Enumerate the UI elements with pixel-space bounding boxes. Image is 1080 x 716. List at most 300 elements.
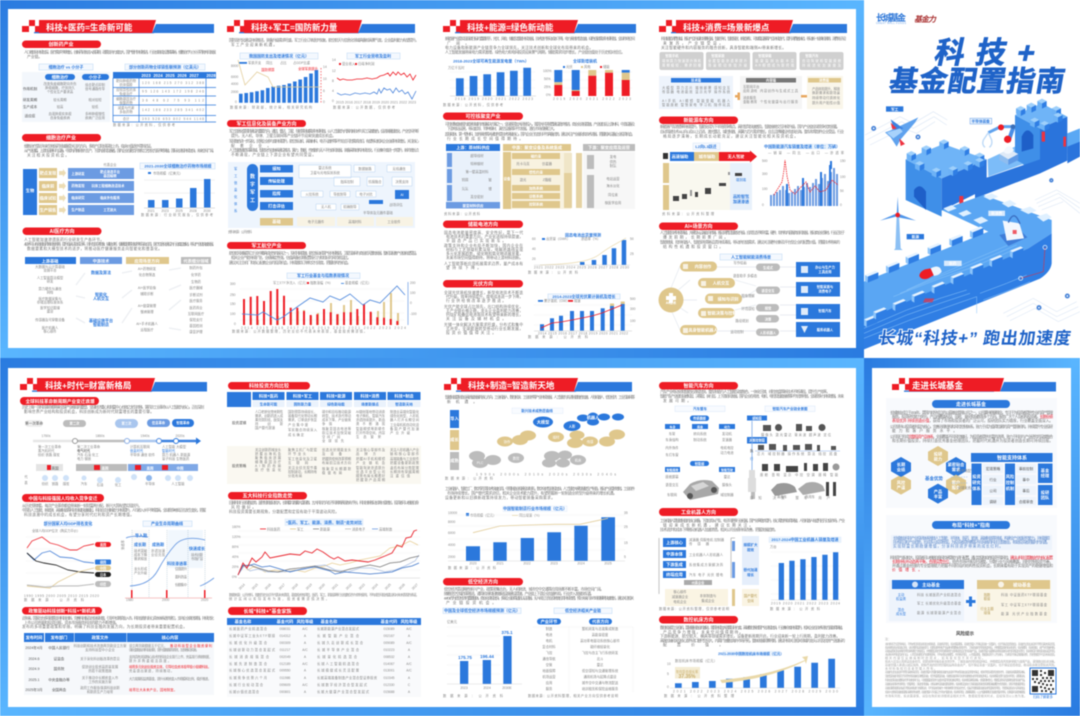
diagram: AI应用图谱: 办公与生产力 bbox=[815, 264, 836, 270]
chart: 行业表现: 0 bbox=[234, 322, 236, 326]
bubble chart: 技术成熟度: 数据来源：公开资料 bbox=[445, 476, 494, 480]
table: 全球药物销售: 双特异性抗体 bbox=[116, 87, 137, 92]
diagram: 产业链结构: 铍 bbox=[488, 177, 492, 182]
chart: 行业表现: 基金规模（亿元） bbox=[345, 280, 371, 285]
table: 基金清单: A/C bbox=[302, 662, 308, 666]
table: 基金清单: 长城创新动力混合发起式 bbox=[229, 647, 276, 652]
text: 储能方向: 半固态产品已实现装车。 bbox=[446, 238, 506, 243]
diagram: 产业链: 代表企业 bbox=[103, 162, 117, 167]
table: 全球药物销售: 核酸药物 bbox=[119, 100, 133, 105]
table: 方向比较: 需求，订单逐步恢复 bbox=[288, 417, 318, 422]
diagram: 产业链结构: 核医学应用 bbox=[605, 200, 621, 205]
stacked chart: 能源结构: 光伏 bbox=[566, 64, 573, 69]
cards: 四类消费: 智能汽车 bbox=[805, 53, 819, 58]
text: section body: 细胞治疗是近年来生物医药领域备受关注的方向，多款产品陆续获批上市，临床价值逐步得到验证。 bbox=[24, 144, 154, 148]
diagram: 智能驾驶技术架构: 乘用车 bbox=[777, 494, 788, 499]
chart: 军费与营收: 占GDP比重 bbox=[293, 60, 311, 65]
table: 方向比较: 逢低布局分散配置 bbox=[390, 465, 420, 470]
diagram: 消费三要素: 持续带动付费转化 bbox=[812, 95, 841, 100]
table: 方向比较: 注重估值 bbox=[390, 473, 411, 478]
chart: 光伏装机: 300 bbox=[630, 307, 636, 311]
chart: 军费与营收: 14 bbox=[323, 65, 327, 69]
icon: jet bbox=[885, 117, 918, 147]
line chart: 五大行业走势: 2021 bbox=[331, 583, 339, 591]
diagram: 产业图谱: 中游技术 bbox=[93, 258, 110, 264]
diagram: 六边形: 长期 bbox=[897, 461, 905, 468]
diagram: 消费三要素: 应用 游戏 bbox=[743, 88, 758, 93]
icon: bag bbox=[999, 216, 1027, 246]
cards: 四类消费 bbox=[660, 52, 844, 70]
bubble chart: 技术成熟度: 传感 bbox=[587, 439, 594, 444]
table: 方向比较: 需求，创新药进入成 bbox=[255, 413, 284, 418]
text: intro: 人工智能发展带来电力需求激增，绿色电力和电网投资迎来景气周期，储能需求同步增长，产业链估值处于历史相对低位。 bbox=[445, 50, 625, 54]
chart: 生命周期: 龙头形成 bbox=[134, 566, 148, 571]
table: 细胞治疗与小分子: 疾病广泛应用 bbox=[85, 115, 105, 120]
diagram: 数字军工: 半导体及元器件基础 bbox=[363, 210, 394, 215]
line chart: 五大行业走势: 20% bbox=[232, 565, 239, 569]
chart: 生命周期: 技术突破 bbox=[134, 548, 148, 553]
diagram: 产业链结构: 下游集成 bbox=[666, 561, 684, 568]
diagram: 产业图谱: 存储治理标准体系 bbox=[37, 300, 64, 304]
text: AI+场景 bbox=[660, 230, 845, 249]
pill: 数控机床 bbox=[659, 616, 738, 624]
diagram: 数字军工: 指挥 bbox=[272, 190, 281, 197]
line chart: 五大行业走势: 2027 bbox=[411, 583, 419, 591]
diagram: 数字军工: 工 bbox=[234, 174, 238, 178]
line chart: 五大行业走势: 军工 bbox=[297, 528, 304, 532]
box: 主动权益 bbox=[889, 580, 964, 621]
table: 政策: 推动科技型企业融资便利 bbox=[170, 643, 212, 648]
bubble chart: 技术成熟度: 大模型 bbox=[537, 418, 549, 426]
table: 方向比较: 顺势布局长期看好 bbox=[356, 473, 386, 478]
diagram: 智能驾驶: 高速辅助 bbox=[672, 153, 688, 160]
text: 光伏方向: 投资价值值得关注。 bbox=[446, 330, 496, 335]
icon: car bbox=[683, 480, 719, 500]
diagram: 六边形: 服务 bbox=[952, 484, 961, 491]
box: 引言 bbox=[891, 535, 1052, 550]
text: 免责声明: 本材料仅为宣传用途，不构成任何投资建议或承诺，基金有风险，投资需谨慎。基金管理人不保证基金一定盈利，也不保证最低收益，基金的过往业绩并不预示其未来表现。 bbox=[885, 641, 1057, 646]
table: 方向比较: 生态繁荣 bbox=[356, 434, 382, 439]
table: 方向比较: 绿色新动能 bbox=[327, 402, 345, 406]
diagram: 数字军工: 数据链路 bbox=[358, 166, 372, 171]
diagram: 汽车零部件: 座舱屏幕 bbox=[665, 474, 679, 479]
table: 政策: 培育多元化创业投资主体，引导社会资本投早投小投硬科技。 bbox=[129, 664, 211, 669]
bubble chart: 技术成熟度: 1990s 2000s 2010s 2020s 2030s 2040s bbox=[476, 472, 616, 476]
diagram: 产业图谱: 应用场景方向 bbox=[134, 258, 160, 264]
tagline: 长城“科技+” 跑出加速度 bbox=[877, 328, 1072, 348]
table: 基金清单: A/C bbox=[302, 683, 308, 687]
bar chart: 工业机器人市场: 25 bbox=[624, 525, 628, 529]
diagram: 产业图谱: 核心部件 bbox=[43, 328, 57, 334]
diagram: 产业链结构: 传感器 bbox=[689, 541, 710, 546]
table: 投研支持体系: 体系 bbox=[972, 485, 981, 492]
diagram: 汽车零部件: 内外饰件 bbox=[665, 445, 679, 450]
table: 方向比较: 科技+制造 bbox=[394, 392, 414, 400]
box: 主动权益: 权益类 bbox=[896, 596, 907, 601]
bar chart: 低空规模 bbox=[443, 607, 522, 698]
line chart: 五大行业走势: 新能源 bbox=[320, 526, 331, 532]
diagram: 连接 bbox=[951, 468, 975, 490]
table: 基金清单: 014067 bbox=[383, 662, 395, 666]
chart: 军费与营收: 数据来源：财政部，统计局，相关研究机构 bbox=[230, 104, 313, 110]
diagram: 产业图谱: 辅助诊断 bbox=[140, 291, 154, 296]
diagram: 产业图谱: 医疗数据采集与 bbox=[38, 296, 62, 301]
bar chart: 数控机床规模: 数据来源：公开资料整理 bbox=[664, 693, 735, 698]
timeline: 工业革命: 人工智能 大模型 bbox=[162, 444, 187, 449]
table: 基金清单: 长城稳健成长灵活配置 bbox=[317, 668, 360, 672]
cards: 四类消费: 自动驾驶和智能座舱 bbox=[802, 58, 842, 63]
table: 方向比较: 聚焦临床进展 bbox=[255, 455, 282, 460]
pill: AI医疗: AI医疗方向 bbox=[49, 228, 75, 235]
text: 光伏方向: 关注设备及辅材机会。 bbox=[446, 316, 506, 321]
chart: 行业景气: 0 bbox=[332, 99, 334, 103]
table: 全球药物销售: 免疫治疗 bbox=[119, 91, 133, 96]
table: 基金清单: 015089 bbox=[383, 627, 395, 631]
line chart: 五大行业走势: 2019 bbox=[305, 583, 313, 591]
timeline: 工业革命: 智能革命 bbox=[176, 420, 190, 425]
bubble chart: 技术成熟度: 机床 bbox=[575, 458, 582, 462]
pill: 基金推荐: 长城“科技+”基金家族 bbox=[244, 608, 291, 615]
chart: 生命周期: 成本下降 bbox=[134, 552, 148, 557]
diagram: 产业链结构: 本体制造与 bbox=[700, 593, 716, 598]
text: 免责声明: 基金是否和投资者的风险承受能力相适应，并根据自身的风险承受能力选择适合自己的基金产品，基金管理人提醒投资者基金投资的买者自负原则，投资者自行承担基金运营风险。 bbox=[885, 648, 1057, 653]
pill: 航空航天 bbox=[227, 242, 306, 250]
table: 基金清单: 014312 bbox=[279, 634, 291, 638]
header: 科技+制造: 科技+制造=智造新天地 bbox=[468, 380, 555, 390]
timeline: 工业革命: 铁路 bbox=[52, 481, 59, 486]
pill: 工业机器人: 工业机器人方向 bbox=[681, 509, 716, 516]
table: 方向比较: 军工信息化及卫星 bbox=[288, 456, 318, 461]
diagram: 产业链 bbox=[23, 162, 134, 215]
pill: 科技投资方法 bbox=[228, 382, 310, 390]
timeline: 工业革命: 第二次工业革命 bbox=[77, 444, 101, 449]
diagram: 汽车零部件: 动力电池 bbox=[720, 450, 734, 455]
panel: 科技+时代 bbox=[20, 378, 421, 697]
table: 全球药物销售 bbox=[113, 64, 216, 127]
timeline: 工业革命: 纺织 bbox=[42, 481, 49, 486]
text: AI医疗: 数据要素和大模型技术的进步，将推动医疗健康服务走向智能化和普惠化。 bbox=[27, 246, 162, 251]
text: eVTOL作为低空经济的重要载体，商业化进程加快，多家企业取得适航认证进展，无人机在工农业及物流应用持续渗透，预计未来几年市场规模将快速增长，建议关注相关 bbox=[444, 596, 634, 600]
chart: 行业景气: 军工行业营收及盈利 bbox=[355, 52, 391, 58]
table: 投研支持体系: 控制 bbox=[1006, 479, 1014, 486]
chart: 新能源车销量: 500 bbox=[762, 159, 768, 163]
text: 智能制造是制造业高质量发展的核心方向，工业机器人、数控机床、工业软件等产业持续发展，人工智能与先进制造融合加速，人形机器人、低空经济、工业互联网等 bbox=[445, 394, 635, 400]
diagram: 六边形: 客户 bbox=[952, 479, 960, 486]
table: 方向比较: 争强 bbox=[322, 421, 333, 426]
text: 免责声明: 市场有风险，投资需谨慎，请您在购买前详细阅读相关文件，数据截至相关时点，后续情况以公告为准。 bbox=[885, 693, 1027, 698]
table: 方向比较: 装备现代化带动长期 bbox=[288, 413, 318, 418]
title: 科技+: 科技+ bbox=[932, 36, 1039, 70]
text: 免责声明: 科技主题基金主要投资于科技相关行业，可能面临较高的行业集中度风险和波动风险，投资者应审慎决策，合理控制仓位，根据自身情况选择合适的基金产品。 bbox=[885, 677, 1027, 682]
timeline: 工业革命: 美国 bbox=[102, 466, 109, 470]
title: 基金配置指南: 基金配置指南 bbox=[887, 66, 1067, 98]
table: 低空产业链: 数据来源：公开资料整理，相关产业方向仅供参考说明 bbox=[528, 693, 619, 698]
timeline: 工业革命: 电气时代 bbox=[77, 448, 91, 453]
table: 方向比较: 控制波动，长期持有 bbox=[288, 469, 318, 474]
table: 方向比较: 互联网 bbox=[288, 460, 309, 465]
logo: 基金配置: 基金力 bbox=[914, 15, 937, 24]
table: 低空产业链: 服务 bbox=[546, 686, 553, 691]
chart: 生命周期: 技术创新 bbox=[191, 552, 204, 557]
table: 基金清单: 011986 bbox=[280, 676, 291, 680]
diagram: AI应用图谱: 语音交互 bbox=[761, 288, 775, 293]
timeline: 工业革命: 表 bbox=[24, 480, 28, 485]
table: 基金清单: 长城高端装备制造产业混合型证券投资 bbox=[317, 675, 378, 680]
text: intro bbox=[24, 50, 216, 59]
bar chart: 低空规模: 2023 bbox=[460, 686, 468, 690]
text: 和长期价值投资，持续打造优秀基金经理团队，把握时代机遇并为投资者创造长期可持续回报。 bbox=[892, 438, 1053, 443]
table: 基金清单: 长城智能产业混合 bbox=[317, 633, 360, 638]
diagram: 产业链: 生物 bbox=[26, 187, 35, 194]
diagram: 汽车零部件: 智能部 bbox=[695, 461, 705, 466]
table: 方向比较: 成本下降，产业链竞 bbox=[322, 417, 352, 422]
table: 方向比较: 电子换机，智能汽车 bbox=[356, 413, 386, 418]
diagram: 产业链结构: 磁约束 bbox=[531, 154, 542, 158]
diagram: AI应用图谱: 人机交互 bbox=[713, 280, 730, 286]
chart: 军费与营收: 占比 bbox=[280, 60, 287, 65]
timeline: 工业革命 bbox=[24, 419, 201, 487]
labels bbox=[886, 106, 1005, 266]
table: 方向比较: 品牌方 bbox=[356, 451, 377, 456]
table: 方向比较: 把握出海机会 bbox=[255, 451, 282, 456]
table: 政策: 科技创新和技术改造再贷款设立方案 bbox=[74, 643, 127, 648]
near tower bbox=[906, 139, 987, 217]
table: 全球药物销售: 2027 bbox=[189, 73, 199, 78]
table: 低空产业链: 电池 bbox=[546, 632, 553, 637]
text: 下游新能源、航空航天、模具等领域需求增长，设备更新周期开启，行业迎来新一轮上行周期，盈利能力改善。 bbox=[660, 634, 840, 638]
table: 政策: 政策文件 bbox=[92, 634, 109, 641]
diagram: AI应用图谱: 具身智能机器人 bbox=[688, 326, 718, 334]
table: 全球药物销售: 2025 bbox=[165, 73, 175, 78]
table: 全球药物销售: 减重与代谢 bbox=[118, 105, 135, 110]
text: intro: 军工产业迎来新机遇。 bbox=[231, 42, 277, 47]
table: 政策: 发布时间 bbox=[26, 634, 42, 641]
text: 长城基金成立于2001年，是国内较早成立的公募基金管理公司之一，公司秉持稳健理念，专注于为投资者提供专业的资产管理 bbox=[890, 410, 1053, 415]
pill: 走进长城基金 bbox=[932, 400, 1010, 408]
text: 免责声明: 本材料版权归基金管理人所有。 bbox=[885, 666, 937, 670]
bar chart: 工业机器人市场: 4000 bbox=[448, 543, 456, 547]
table: 细胞治疗与小分子: 改造免疫细胞靶向杀伤 bbox=[44, 81, 77, 86]
table: 基金清单: 长城大健康产业混合型发起式 bbox=[317, 689, 370, 694]
panel: 科技+制造 bbox=[443, 378, 845, 698]
chart: 军费与营收: 2000 bbox=[231, 90, 239, 94]
table: 细胞治疗与小分子 bbox=[22, 64, 110, 122]
chart: 行业景气: 归母净利润 bbox=[358, 61, 375, 66]
text: intro bbox=[661, 36, 846, 50]
chart: 固态电池: 2021 2022 2023 2024 2025 2026 2027 2028 2030 bbox=[534, 266, 629, 270]
diagram: 六边形: 投研 bbox=[934, 450, 943, 458]
table: 方向比较: AI制药布局 bbox=[255, 463, 281, 468]
chart: 新能源车销量 bbox=[762, 143, 846, 207]
stacked chart: 能源结构: 全球新增装机 bbox=[573, 58, 597, 64]
chart: 光伏装机 bbox=[528, 293, 636, 339]
chart: 行业景气: 14 bbox=[332, 58, 336, 62]
bar chart: 数控机床规模: 10 bbox=[667, 662, 671, 666]
table: 投研支持体系: 事中 bbox=[1022, 477, 1030, 482]
diagram: AI应用图谱: 人形机器人 bbox=[760, 330, 777, 335]
chart: 新能源车销量: 中国新能源汽车销量及增速（单位：万辆） bbox=[764, 143, 840, 149]
table: 方向比较: 布局前沿技术方向 bbox=[322, 460, 351, 465]
table: 政策: 中国人民银行 bbox=[48, 645, 70, 650]
diagram: 数字军工: 电子对抗 bbox=[359, 192, 373, 196]
diagram: 数字军工: 字 bbox=[250, 181, 255, 188]
pill: 储能产业 bbox=[443, 112, 523, 120]
table: 基金清单: C bbox=[408, 683, 411, 687]
chart: 生命周期: 2020 bbox=[201, 598, 209, 602]
table: 投研支持体系: 宏观策略 bbox=[986, 466, 1001, 471]
table: 方向比较: 智造新天地 bbox=[395, 402, 413, 406]
diagram: 数字军工: 感知 bbox=[272, 165, 281, 172]
diagram: 消费三要素: 技术端 bbox=[691, 78, 702, 82]
diagram: 消费三要素: 消费端 bbox=[819, 78, 830, 82]
chart: 生命周期: 产业生命周期曲线 bbox=[151, 520, 183, 526]
table: 全球药物销售: 2028 bbox=[206, 73, 216, 78]
chart: 生命周期: 2000 bbox=[162, 598, 170, 602]
table: 方向比较: 果兑现阶段，医保支 bbox=[255, 417, 284, 422]
diagram: 产业图谱: AI+医学影像 bbox=[138, 285, 157, 290]
table: 基金清单: A/C bbox=[406, 668, 412, 672]
text bbox=[890, 410, 1053, 443]
logo: 长城基金: GREAT WALL FUNDS bbox=[876, 22, 906, 25]
diagram: 产业图谱: 数据及算法 bbox=[91, 269, 111, 275]
table: 基金清单: A bbox=[304, 676, 307, 680]
table: 方向比较: 高端装备与工业软件 bbox=[390, 456, 420, 461]
line chart: 五大行业走势: 0% bbox=[232, 575, 237, 579]
table: 低空产业链: 机场运营 bbox=[542, 674, 556, 679]
note: 资料来源：公开资料 bbox=[228, 229, 253, 234]
table: 细胞治疗与小分子: 信号通路传导 bbox=[85, 86, 106, 91]
table: 全球药物销售: 142 186 233 285 341 402 bbox=[142, 108, 204, 112]
table: 全球药物销售: 靶向肿瘤药物 bbox=[116, 78, 137, 83]
timeline: 工业革命: 英国 bbox=[51, 466, 59, 470]
text: 价值增长。 bbox=[892, 567, 922, 572]
diagram: 产业链结构: 仿星器 bbox=[542, 161, 553, 166]
text: section body bbox=[24, 144, 216, 158]
text: 回顾科技行业指数走势，虽然短期波动较大，长期看均跑赢大盘指数。五大科技方向在不同周期表现各有千秋，科技创新推动长期价值增长，投资者可以根据自身 bbox=[229, 500, 419, 505]
labels: 医药 bbox=[949, 261, 957, 266]
chart: 新能源车销量: 0 bbox=[762, 203, 764, 207]
diagram: 产业链结构: 真空密封 bbox=[470, 194, 484, 199]
diagram: 产业链结构: 特种钢材 bbox=[470, 161, 484, 166]
bar chart: 市场规模: 市场规模（亿美元） bbox=[153, 170, 183, 176]
diagram: 产业链结构: 提效 bbox=[747, 547, 754, 552]
table: 细胞治疗与小分子: 血液肿瘤实体瘤 bbox=[48, 111, 72, 116]
table: 政策: 2025.1 bbox=[28, 678, 40, 682]
timeline: 工业革命: 半导体 bbox=[145, 481, 156, 486]
text: intro: 科技赋能消费领域，推动产品升级和场景拓展，智能手机、智能家居、新能源车、可穿戴设备等产品持续迭代，提升消费者体验，带动新一轮换机周期，消费电子迎 bbox=[661, 36, 846, 41]
diagram: 产业链结构: Z箍缩 bbox=[543, 177, 552, 182]
text: intro: 电力设备和新能源产业链竞争力全球领先，关注技术创新和全球化布局带来的机会。 bbox=[445, 45, 593, 50]
diagram: 智能驾驶: L2向L3跃迁 bbox=[695, 143, 717, 149]
diagram: AI应用图谱: 视觉 bbox=[765, 305, 772, 310]
table: 方向比较: 国产替代提速 bbox=[255, 425, 276, 430]
text: 产业链投资机会。 bbox=[446, 600, 496, 605]
text: 影响世界产业结构和投资机会，科技创新成为新时代财富增长的重要引擎。 bbox=[24, 409, 154, 414]
bar chart: 工业机器人市场: 2000 bbox=[448, 555, 456, 559]
table: 低空产业链: 雷达 bbox=[597, 662, 604, 667]
table: 政策: 支持具有关键核心技术的科技企业发行上市，完善发行承销制度， bbox=[129, 654, 212, 659]
table: 基金清单: 长城行业轮动混合 bbox=[229, 682, 264, 687]
table: 方向比较: 生命新可能 bbox=[260, 402, 278, 406]
text: 光伏方向: 主产业链价格企稳，龙头企业盈利能力改善， bbox=[446, 308, 523, 313]
timeline: 工业革命: 蒸汽机时代 bbox=[38, 448, 55, 453]
table: 方向比较: 优选平台型公司 bbox=[356, 469, 385, 474]
table: 细胞治疗与小分子: 生产成本 bbox=[23, 104, 38, 109]
table: 基金清单: 长城价值优选混合 bbox=[229, 689, 260, 694]
diagram: AI应用图谱: 写作绘画 bbox=[733, 260, 747, 265]
bubble chart: 技术成熟度: 数控 bbox=[513, 456, 520, 460]
table: 低空产业链: 电机 bbox=[546, 638, 553, 643]
timeline: 工业革命: 美国 bbox=[146, 466, 154, 470]
table: 基金清单: 008532 bbox=[383, 655, 395, 659]
table: 基金清单: 012330 bbox=[383, 683, 395, 687]
chart: 军费与营收: 8000 bbox=[231, 64, 239, 68]
bubble chart: 技术成熟度 bbox=[445, 408, 625, 480]
diagram: AI应用图谱: 消费电子 bbox=[818, 288, 832, 294]
table: 方向比较: 全球领先 bbox=[322, 438, 345, 443]
text: 低空经济是战略性新兴产业，政策密集出台，无人机物流、城市空中交通等应用场景不断丰富，市场空间广阔。 bbox=[444, 586, 604, 592]
bar chart: 工业机器人市场: 10000 bbox=[448, 511, 457, 515]
diagram: AI应用图谱: 人工智能赋能消费场景 bbox=[731, 254, 771, 260]
table: 方向比较: 分批布局 bbox=[288, 473, 302, 478]
line chart: 五大行业走势: 2018 bbox=[291, 583, 299, 591]
table: 政策: 关于推动中长期资金入市 bbox=[82, 675, 119, 680]
text: 汽车产业电动化和智能化进程加快，整车制造与人工智能深度融合，一体化压铸、线控底盘等新技术不断涌现，提升生产效率。 bbox=[660, 389, 830, 394]
text: 航空航天: 航空航天装备是军工行业中最具成长性的板块之一，军机列装提速，航空发动机国产化持续推进，卫星互联网与商业航天蓬勃发展，整机及配套产业链有望受益， bbox=[229, 250, 419, 256]
diagram: 六边形: 紧密贴合 bbox=[948, 461, 965, 468]
illustration: great wall bbox=[864, 99, 1080, 349]
table: 方向比较: 关注业绩兑现节奏 bbox=[288, 465, 318, 470]
table: 基金清单: 长城量化精选混合 bbox=[317, 654, 358, 659]
diagram: 六边形: 丰富 bbox=[934, 493, 942, 500]
chart: 生命周期: 成长期 bbox=[134, 541, 146, 547]
chart: 固态电池: 25 bbox=[630, 252, 634, 256]
box: 主动权益: 能源 长城新能源产业混合 bbox=[917, 610, 962, 615]
diagram: 产业图谱: 医药商业 bbox=[189, 305, 203, 310]
diagram: 产业链结构: 发电 bbox=[610, 154, 617, 159]
text: 免责声明: 本资料中所提及的行业、公司及指数仅作说明使用，不构成投资推荐。市场有风险，入市需谨慎，数据来源于公开资料，力求但不保证准确完整，历史数据不代表未来走势。 bbox=[885, 652, 1057, 656]
text: 公司现已形成完整投资产品体系，全面覆盖不同风险偏好，为投资者提供丰富的选择，致力于科技与产业研究的深度融合 bbox=[890, 434, 1053, 439]
bar chart: 低空规模: 2024 bbox=[483, 686, 491, 690]
bar chart: 工业机器人市场: 2024 bbox=[577, 562, 585, 566]
diagram: 产业链结构: 工业机器人人形机器人 bbox=[689, 552, 724, 557]
table: 基金清单: 008031 bbox=[279, 627, 291, 631]
chart: 新能源车销量: 300 bbox=[762, 172, 768, 176]
table: 方向比较: 细胞基因治疗 bbox=[255, 459, 282, 464]
diagram: 数字军工: 战场评估 bbox=[389, 202, 403, 207]
bar chart: 工业机器人市场: 5 bbox=[624, 555, 626, 559]
bubble chart: 技术成熟度: 人形 bbox=[569, 424, 576, 428]
diagram: 数字军工: 息 bbox=[234, 187, 238, 192]
text: 科技投资需要长期视角，分散配置和定投有助于平滑波动风险。 bbox=[229, 509, 339, 514]
bar chart: 市场规模: 2030 bbox=[203, 209, 211, 213]
bar chart: 市场规模: 2025 bbox=[175, 209, 183, 213]
text: intro: 新能源产业是实现双碳目标的重要抓手，光伏、风电、储能及氢能持续发展，技术迭代带动成本下降，电力系统转型加速，绿色低碳需求持续释放，全球市场空间 bbox=[445, 36, 635, 41]
diagram: 数字军工: 卫星与光电探测系统 bbox=[310, 170, 341, 175]
diagram: 数字军工: 电子元器件 bbox=[308, 219, 325, 224]
table: 低空产业链 bbox=[528, 607, 633, 698]
diagram: 产业图谱: 保险支付 bbox=[189, 317, 203, 322]
table: 基金清单: 009089 bbox=[383, 641, 395, 645]
box: 主动权益: 主动 bbox=[898, 592, 905, 597]
chart: 光伏装机: 100 bbox=[630, 319, 636, 323]
table: 方向比较: 科技+消费 bbox=[360, 392, 380, 400]
pill: 大国竞争: 中国与科技强国人均收入竞争变迁 bbox=[29, 495, 98, 502]
diagram: 产业链结构: 中游本体 bbox=[666, 550, 684, 558]
table: 基金清单: A bbox=[304, 668, 307, 672]
heading: 风险提示: 风险提示 bbox=[956, 630, 974, 637]
bar chart: 工业机器人市场: 8000 bbox=[448, 520, 456, 524]
